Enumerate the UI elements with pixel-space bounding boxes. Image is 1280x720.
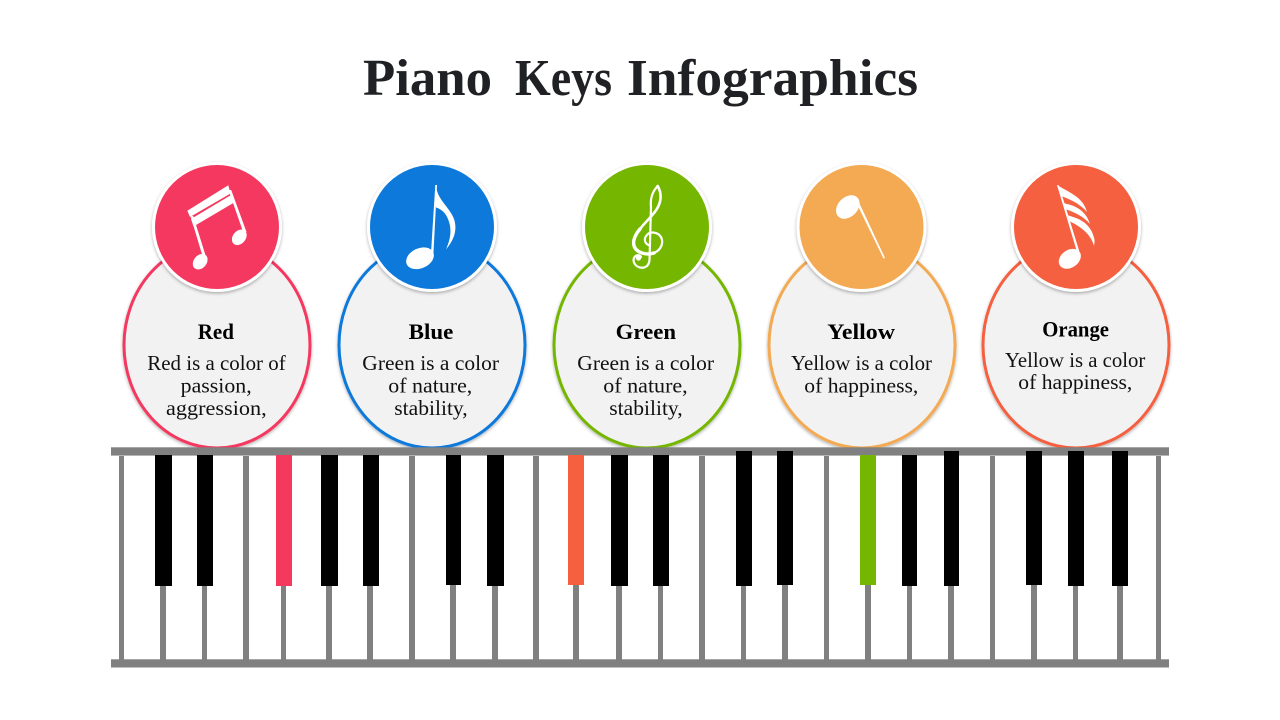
- yellow body text: [791, 351, 932, 398]
- yellow body text: Yellow is a color: [791, 351, 932, 375]
- orange heading: Orange: [1042, 317, 1109, 342]
- blue body text: Green is a color: [362, 351, 499, 375]
- orange key: [568, 455, 584, 585]
- blue ellipse: [339, 242, 525, 448]
- top rail: [111, 447, 1169, 456]
- bottom rail: [111, 659, 1169, 668]
- red body text: aggression,: [166, 396, 267, 420]
- green body text: stability,: [609, 396, 683, 420]
- green ellipse: [554, 242, 740, 448]
- red body text: passion,: [181, 374, 252, 398]
- icon: inverted quarter note: [798, 164, 925, 290]
- title: Piano: [363, 50, 492, 107]
- blue body text: [362, 351, 499, 420]
- black keys: [155, 451, 1128, 586]
- piano keyboard: [111, 447, 1169, 668]
- title: Keys: [515, 50, 612, 107]
- red heading: Red: [198, 319, 234, 344]
- blue body text: of nature,: [388, 374, 472, 398]
- green body text: [577, 351, 714, 420]
- panel: orange: [983, 164, 1169, 448]
- icon: eighth note: [368, 164, 496, 290]
- icon: triple-flag note: [1012, 164, 1140, 290]
- key divider lines: [119, 456, 1161, 661]
- yellow body text: of happiness,: [804, 374, 918, 398]
- green body text: of nature,: [603, 374, 688, 398]
- panel: green: [554, 164, 740, 448]
- yellow heading: Yellow: [827, 319, 895, 344]
- icon: treble clef: [584, 164, 710, 290]
- orange ellipse: [983, 242, 1169, 448]
- blue heading: Blue: [409, 319, 454, 344]
- green heading: Green: [616, 319, 676, 344]
- yellow ellipse: [769, 242, 955, 448]
- panel: red: [124, 164, 310, 448]
- red body text: Red is a color of: [147, 351, 286, 375]
- orange body text: Yellow is a color: [1005, 348, 1145, 372]
- icon: beamed notes: [154, 164, 280, 290]
- blue body text: stability,: [394, 396, 468, 420]
- red key: [276, 455, 292, 586]
- panel: yellow: [769, 164, 955, 448]
- orange body text: of happiness,: [1018, 370, 1132, 394]
- title: [363, 50, 918, 107]
- title: Infographics: [627, 50, 918, 107]
- panel: blue: [339, 164, 525, 448]
- green key: [860, 455, 876, 585]
- green body text: Green is a color: [577, 351, 714, 375]
- red ellipse: [124, 242, 310, 448]
- red body text: [147, 351, 286, 420]
- orange body text: [1005, 348, 1145, 394]
